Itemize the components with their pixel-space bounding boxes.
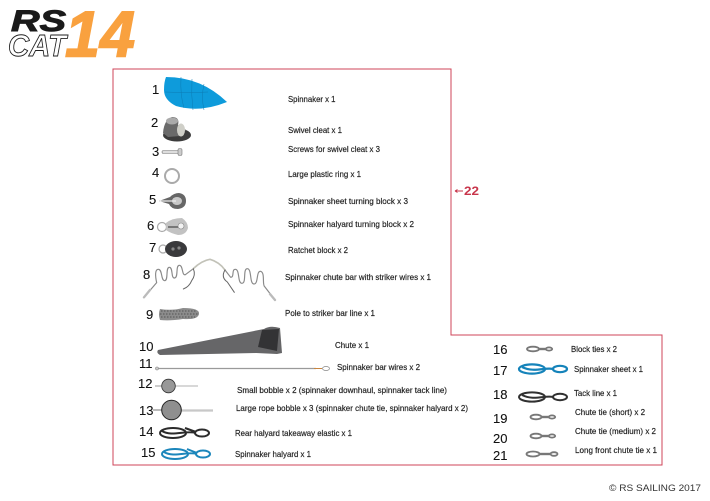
item 8: chute bar with striker wires <box>143 259 431 300</box>
item 17: spinnaker sheet: Spinnaker sheet x 1 <box>574 364 643 374</box>
item 9: pole to striker bar line: Pole to striker bar line x 1 <box>285 308 375 318</box>
item 2: swivel cleat <box>151 115 342 142</box>
item 19: chute tie short <box>493 407 645 426</box>
item 10: chute: Chute x 1 <box>335 340 369 350</box>
item 3: screws: 3 <box>152 144 159 159</box>
item 18: tack line: Tack line x 1 <box>574 388 617 398</box>
item 9: pole to striker bar line: 9 <box>146 307 153 322</box>
item 6: spinnaker halyard turning block <box>147 218 414 235</box>
item 20: chute tie medium: 20 <box>493 431 507 446</box>
item 2: swivel cleat: 2 <box>151 115 158 130</box>
item 18: tack line <box>493 387 617 402</box>
item 21: long front chute tie <box>493 445 657 463</box>
item 15: spinnaker halyard: Spinnaker halyard x 1 <box>235 449 311 459</box>
item 6: spinnaker halyard turning block: 6 <box>147 218 154 233</box>
item 3: screws: Screws for swivel cleat x 3 <box>288 144 380 154</box>
logo: RS CAT 14 <box>8 0 135 70</box>
logo: RS CAT 14: CAT <box>8 28 69 63</box>
item 18: tack line: 18 <box>493 387 507 402</box>
item 1: spinnaker: 1 <box>152 82 159 97</box>
item 14: rear halyard takeaway elastic <box>139 424 352 439</box>
item 8: chute bar with striker wires: 8 <box>143 267 150 282</box>
item 4: plastic ring: 4 <box>152 165 159 180</box>
copyright: © RS SAILING 2017 <box>609 483 701 494</box>
item 17: spinnaker sheet: 17 <box>493 363 507 378</box>
item 1: spinnaker <box>152 77 336 110</box>
logo: RS CAT 14: RS <box>11 5 66 38</box>
item 9: pole to striker bar line <box>146 307 375 322</box>
item 19: chute tie short: Chute tie (short) x 2 <box>575 407 645 417</box>
callout: arrow to 22 <box>455 184 479 198</box>
item 12: small bobble: 12 <box>138 376 152 391</box>
item 16: block ties: 16 <box>493 342 507 357</box>
item 11: spinnaker bar wires: Spinnaker bar wires x 2 <box>337 362 420 372</box>
item 3: screws <box>152 144 380 159</box>
panel: red outline around kit parts <box>113 69 662 465</box>
item 8: chute bar with striker wires: Spinnaker chute bar with striker wires x 1 <box>285 272 431 282</box>
item 15: spinnaker halyard: 15 <box>141 445 155 460</box>
item 19: chute tie short: 19 <box>493 411 507 426</box>
item 7: ratchet block <box>149 240 348 257</box>
item 20: chute tie medium <box>493 426 656 446</box>
item 16: block ties <box>493 342 617 357</box>
item 7: ratchet block: Ratchet block x 2 <box>288 245 348 255</box>
item 11: spinnaker bar wires: 11 <box>139 356 152 371</box>
item 13: large rope bobble: 13 <box>139 403 153 418</box>
item 5: spinnaker sheet turning block <box>149 192 408 209</box>
item 6: spinnaker halyard turning block: Spinnaker halyard turning block x 2 <box>288 219 414 229</box>
item 13: large rope bobble <box>139 400 468 420</box>
callout: arrow to 22: 22 <box>464 184 479 198</box>
item 10: chute <box>139 327 369 355</box>
item 16: block ties: Block ties x 2 <box>571 344 617 354</box>
item 12: small bobble: Small bobble x 2 (spinnaker downhaul, spinnaker tack line) <box>237 385 447 395</box>
item 4: plastic ring <box>152 165 361 183</box>
item 20: chute tie medium: Chute tie (medium) x 2 <box>575 426 656 436</box>
item 12: small bobble <box>138 376 447 395</box>
item 1: spinnaker: Spinnaker x 1 <box>288 94 336 104</box>
item 14: rear halyard takeaway elastic: 14 <box>139 424 153 439</box>
item 7: ratchet block: 7 <box>149 240 156 255</box>
item 5: spinnaker sheet turning block: Spinnaker sheet turning block x 3 <box>288 196 408 206</box>
item 21: long front chute tie: Long front chute tie x 1 <box>575 445 657 455</box>
item 15: spinnaker halyard <box>141 445 311 460</box>
item 13: large rope bobble: Large rope bobble x 3 (spinnaker chute tie, spinnaker halyard x 2) <box>236 403 468 413</box>
item 2: swivel cleat: Swivel cleat x 1 <box>288 125 342 135</box>
item 17: spinnaker sheet <box>493 363 643 378</box>
item 10: chute: 10 <box>139 339 153 354</box>
item 11: spinnaker bar wires <box>139 356 420 372</box>
item 5: spinnaker sheet turning block: 5 <box>149 192 156 207</box>
item 21: long front chute tie: 21 <box>493 448 507 463</box>
item 4: plastic ring: Large plastic ring x 1 <box>288 169 361 179</box>
item 14: rear halyard takeaway elastic: Rear halyard takeaway elastic x 1 <box>235 428 352 438</box>
